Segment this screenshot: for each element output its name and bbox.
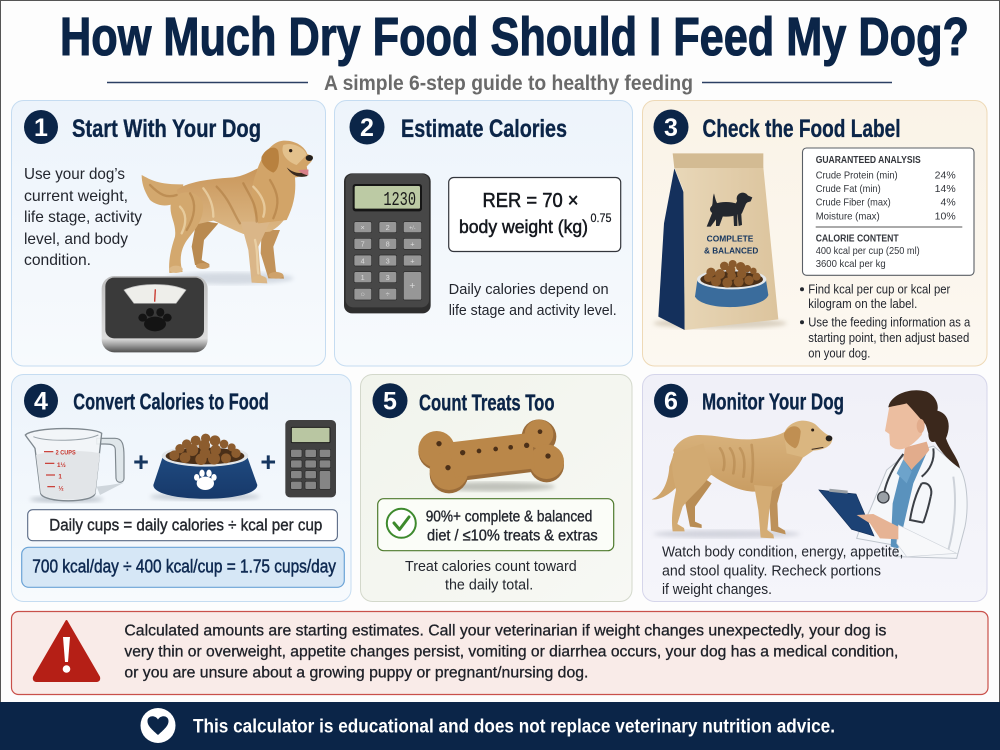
panel: step 6 monitor your dog xyxy=(642,374,987,602)
treat rule box: 90%+ complete & balanced xyxy=(426,509,592,526)
neck and head xyxy=(252,141,313,223)
step 3 bullet list xyxy=(800,281,971,360)
formula box: body weight (kg) xyxy=(459,217,588,237)
illustration: calculator: + xyxy=(409,281,415,292)
illustration: dog biscuit xyxy=(418,419,564,493)
food label box: 4% xyxy=(941,197,956,209)
step 1 text: condition. xyxy=(24,252,91,269)
illustration: golden retriever xyxy=(142,141,313,284)
tail xyxy=(142,175,183,205)
icon: heart xyxy=(140,708,176,743)
step 3 bullet list: kilogram on the label. xyxy=(808,296,917,311)
illustration: measuring cup: 1½ xyxy=(57,461,66,469)
illustration: calculator: +/- xyxy=(409,225,416,231)
step 1 text: life stage, activity xyxy=(24,209,142,226)
food label box: Crude Fiber (max) xyxy=(816,197,891,209)
illustration: calculator: 1230 xyxy=(383,189,416,211)
step 3 bullet list: starting point, then adjust based xyxy=(808,330,969,345)
illustration: calculator: 7 xyxy=(361,240,365,249)
step 5 text: the daily total. xyxy=(445,578,533,594)
illustration: calculator: 4 xyxy=(361,256,365,265)
formula box: 0.75 xyxy=(590,213,612,225)
warning text: Calculated amounts are starting estimates. Call your veterinarian if weight changes unexpectedly, your dog is xyxy=(124,622,887,640)
step 6 number badge: 6 xyxy=(664,388,678,416)
illustration: calculator xyxy=(344,173,431,313)
black dog silhouette xyxy=(707,193,752,227)
food label box xyxy=(802,148,974,275)
treat rule box: diet / ≤10% treats & extras xyxy=(427,527,598,544)
illustration: calculator: 2 xyxy=(386,223,390,232)
formula box: daily cups xyxy=(28,510,337,541)
plus sign: + xyxy=(260,447,276,477)
torso xyxy=(177,167,294,234)
formula box xyxy=(449,178,621,252)
far front leg xyxy=(261,230,284,279)
illustration: measuring cup: 1 xyxy=(58,473,62,480)
warning text: very thin or overweight, appetite changes persist, vomiting or diarrhea occurs, your dog has a medical condition, xyxy=(124,644,898,660)
step 5 heading: Count Treats Too xyxy=(419,390,554,416)
step 1 heading: Start With Your Dog xyxy=(72,115,261,143)
illustration: measuring cup: ½ xyxy=(58,485,64,493)
subtitle: A simple 6-step guide to healthy feeding xyxy=(324,72,693,95)
treat rule box xyxy=(378,499,614,551)
illustration: calculator: 3 xyxy=(386,256,390,265)
food label box: Crude Fat (min) xyxy=(816,183,881,195)
footer text: This calculator is educational and does not replace veterinary nutrition advice. xyxy=(193,716,835,738)
food label box: 10% xyxy=(935,210,956,222)
panel: step 3 check the food label xyxy=(642,100,987,366)
illustration: calculator: + xyxy=(410,256,414,265)
step 2 number badge: 2 xyxy=(360,114,374,142)
illustration: calculator: ÷ xyxy=(386,290,390,299)
step 3 number badge: 3 xyxy=(664,114,678,142)
step 6 number badge xyxy=(654,384,688,418)
warning text: or you are unsure about a growing puppy or pregnant/nursing dog. xyxy=(124,664,588,682)
illustration: calculator: + xyxy=(410,240,414,249)
illustration: dog food bag: & BALANCED xyxy=(704,245,758,255)
step 4 number badge xyxy=(24,384,58,418)
plus sign: + xyxy=(133,447,149,477)
step 2 text xyxy=(449,282,617,319)
formula box: daily cups: Daily cups = daily calories ÷ kcal per cup xyxy=(49,516,322,535)
step 2 heading: Estimate Calories xyxy=(401,115,567,143)
panel: step 1 start with your dog xyxy=(12,100,326,366)
step 3 heading: Check the Food Label xyxy=(702,115,900,143)
worked example box: 700 kcal/day ÷ 400 kcal/cup = 1.75 cups/day xyxy=(32,556,337,577)
illustration: calculator: ○ xyxy=(360,290,365,299)
step 6 text: if weight changes. xyxy=(662,582,772,598)
illustration: dog food bag xyxy=(653,153,787,330)
near front leg xyxy=(241,222,270,283)
panel: step 5 count treats too xyxy=(360,374,632,602)
step 6 text: Watch body condition, energy, appetite, xyxy=(662,545,903,561)
step 6 text: and stool quality. Recheck portions xyxy=(662,564,881,580)
illustration: calculator: 8 xyxy=(386,240,390,249)
step 2 text: Daily calories depend on xyxy=(449,282,609,298)
illustration: measuring cup: 2 CUPS xyxy=(56,450,76,457)
worked example box xyxy=(22,547,344,587)
illustration: weighing scale xyxy=(102,276,208,352)
illustration: labrador xyxy=(652,421,832,538)
illustration: measuring cup xyxy=(25,429,124,503)
food label box: 14% xyxy=(935,183,956,195)
warning panel xyxy=(12,612,988,694)
step 1 text: current weight, xyxy=(24,188,128,205)
food label box: 400 kcal per cup (250 ml) xyxy=(816,245,920,257)
far hind leg xyxy=(192,220,218,267)
footer bar xyxy=(0,702,1000,750)
step 3 bullet list: on your dog. xyxy=(808,345,870,360)
step 5 number badge xyxy=(372,383,408,418)
formula box: RER = 70 × xyxy=(482,190,578,212)
step 1 number badge: 1 xyxy=(34,114,48,142)
step 4 heading: Convert Calories to Food xyxy=(73,388,269,414)
illustration: veterinarian with clipboard xyxy=(819,390,967,558)
illustration: small calculator xyxy=(285,420,336,497)
step 2 text: life stage and activity level. xyxy=(449,303,617,319)
step 5 number badge: 5 xyxy=(383,388,397,416)
step 5 text: Treat calories count toward xyxy=(405,559,577,575)
step 4 number badge: 4 xyxy=(34,388,48,416)
step 1 text: Use your dog’s xyxy=(24,166,125,183)
step 1 text: level, and body xyxy=(24,231,128,248)
step 3 number badge xyxy=(654,110,688,144)
near hind leg xyxy=(169,192,203,273)
warning text xyxy=(124,622,898,682)
step 6 heading: Monitor Your Dog xyxy=(702,388,844,414)
illustration: dog food bag: COMPLETE xyxy=(707,234,754,244)
food label box: CALORIE CONTENT xyxy=(816,233,899,245)
icon: check mark xyxy=(387,509,416,538)
food label box: GUARANTEED ANALYSIS xyxy=(816,154,921,166)
step 5 text xyxy=(405,559,577,594)
illustration: calculator: 1 xyxy=(361,273,365,282)
illustration: calculator: 3 xyxy=(386,273,390,282)
food label box: Crude Protein (min) xyxy=(816,170,898,182)
step 3 bullet list: Find kcal per cup or kcal per xyxy=(808,281,951,296)
illustration: food bowl with paw xyxy=(150,434,260,501)
panel: step 4 convert calories to food xyxy=(12,374,351,602)
panel: step 2 estimate calories xyxy=(334,100,632,366)
step 6 text xyxy=(662,545,903,598)
icon: warning triangle xyxy=(34,621,99,681)
food label box: 24% xyxy=(935,170,956,182)
step 1 number badge xyxy=(24,110,58,144)
step 2 number badge xyxy=(350,110,384,144)
step 3 bullet list: Use the feeding information as a xyxy=(808,315,971,330)
step 1 text xyxy=(24,166,142,269)
food label box: 3600 kcal per kg xyxy=(816,258,886,270)
illustration: calculator: × xyxy=(361,223,365,232)
food label box: Moisture (max) xyxy=(816,210,880,222)
